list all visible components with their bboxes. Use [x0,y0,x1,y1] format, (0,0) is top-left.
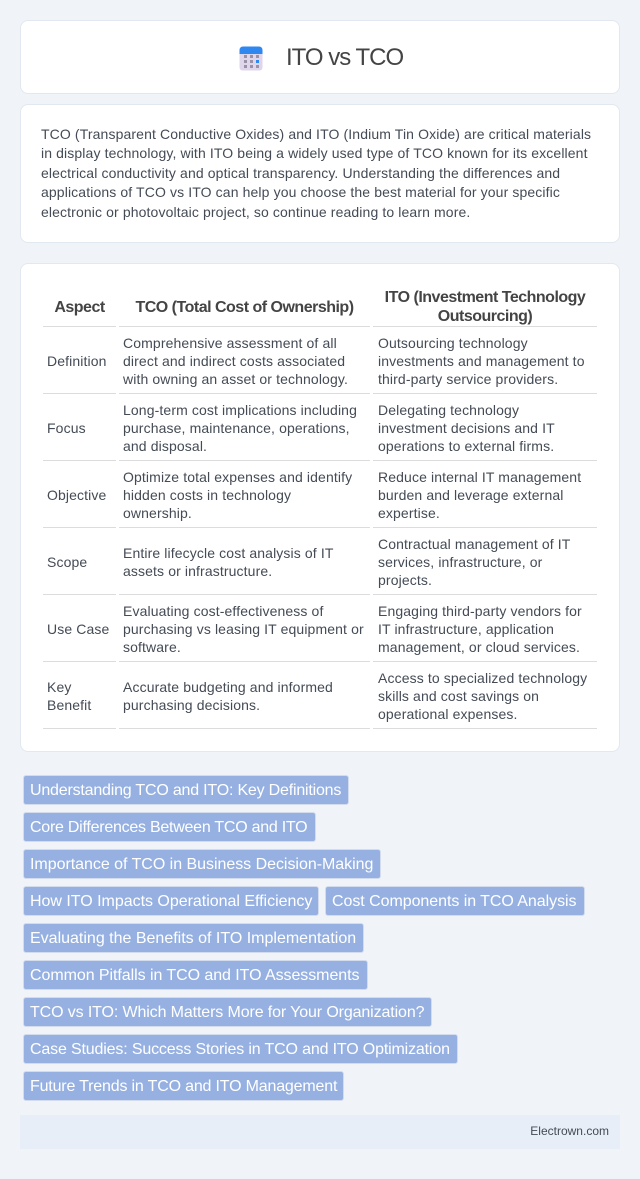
tag [23,923,364,953]
intro text: electrical conductivity and optical transparency. Understanding the differences and [41,165,560,181]
intro text [41,126,591,220]
row: Key Benefit: skills and cost savings on [378,688,539,704]
row: Definition: with owning an asset or technology. [123,371,348,387]
tag [23,1034,458,1064]
row: Definition: third-party service providers. [378,371,558,387]
row: Definition [47,335,585,387]
tag [325,886,585,916]
row: Definition: Definition [47,353,107,369]
row: Use Case: management, or cloud services. [378,639,580,655]
title: ITO vs TCO [286,44,403,71]
row: Use Case: Engaging third-party vendors for [378,603,582,619]
tag [23,960,368,990]
intro text: electronic or photovoltaic project, so continue reading to learn more. [41,204,470,220]
table header: ITO (Investment Technology [385,289,585,306]
row: Scope: Entire lifecycle cost analysis of IT [123,545,334,561]
tag: Common Pitfalls in TCO and ITO Assessments [30,967,359,984]
row: Definition: Comprehensive assessment of all [123,335,337,351]
row: Focus: and disposal. [123,438,207,454]
row: Definition: investments and management to [378,353,585,369]
row: Focus: Focus [47,420,86,436]
row: Key Benefit [47,670,588,722]
row: Objective: hidden costs in technology [123,487,291,503]
row: Use Case: Evaluating cost-effectiveness of [123,603,323,619]
footer credit: Electrown.com [530,1124,609,1138]
tag: Evaluating the Benefits of ITO Implementation [30,930,356,947]
tag: Understanding TCO and ITO: Key Definitions [30,782,341,799]
intro text: TCO (Transparent Conductive Oxides) and ITO (Indium Tin Oxide) are critical materials [41,126,591,142]
row: Definition: Outsourcing technology [378,335,528,351]
row: Objective: burden and leverage external [378,487,564,503]
row: Key Benefit: operational expenses. [378,706,518,722]
row: Scope: services, infrastructure, or [378,554,542,570]
row: Focus [47,402,555,454]
row: Scope [47,536,570,588]
tag: Future Trends in TCO and ITO Management [30,1078,337,1095]
row: Key Benefit: purchasing decisions. [123,697,260,713]
table header [54,289,586,325]
row: Objective: ownership. [123,505,192,521]
row: Objective [47,469,582,521]
intro panel [20,104,620,243]
tag [23,997,432,1027]
footer [20,1115,620,1149]
row: Key Benefit: Benefit [47,697,91,713]
comparison table panel [20,263,620,752]
intro text: in display technology, with ITO being a widely used type of TCO known for its excellent [41,145,588,161]
tag: TCO vs ITO: Which Matters More for Your Organization? [30,1004,424,1021]
row: Focus: purchase, maintenance, operations, [123,420,350,436]
row: Objective: expertise. [378,505,440,521]
row: Use Case [47,603,582,655]
row: Objective: Objective [47,487,106,503]
row: Focus: Delegating technology [378,402,519,418]
row: Key Benefit: Access to specialized technology [378,670,587,686]
icon: calendar [240,46,262,70]
row: Focus: investment decisions and IT [378,420,555,436]
row: Use Case: software. [123,639,181,655]
header panel [20,20,620,94]
row: Objective: Optimize total expenses and identify [123,469,352,485]
table header: Outsourcing) [438,308,532,325]
table header: TCO (Total Cost of Ownership) [135,299,354,316]
tag: Cost Components in TCO Analysis [332,893,576,910]
row: Scope: projects. [378,572,432,588]
row: Scope: Scope [47,554,87,570]
row: Key Benefit: Key [47,679,71,695]
tag: Importance of TCO in Business Decision-Making [30,856,373,873]
row: Scope: Contractual management of IT [378,536,570,552]
topic tag list [23,775,585,1101]
tag [23,886,319,916]
row: Scope: assets or infrastructure. [123,563,272,579]
table header: Aspect [54,299,105,316]
tag [23,849,381,879]
row: Focus: operations to external firms. [378,438,554,454]
row: Focus: Long-term cost implications including [123,402,357,418]
row: Use Case: IT infrastructure, application [378,621,554,637]
row: Use Case: purchasing vs leasing IT equipment or [123,621,364,637]
intro text: applications of TCO vs ITO can help you choose the best material for your specific [41,184,560,200]
row: Key Benefit: Accurate budgeting and informed [123,679,333,695]
row: Definition: direct and indirect costs associated [123,353,345,369]
row: Use Case: Use Case [47,621,109,637]
tag: Case Studies: Success Stories in TCO and ITO Optimization [30,1041,450,1058]
tag [23,812,316,842]
row: Objective: Reduce internal IT management [378,469,581,485]
tag [23,1071,344,1101]
tag [23,775,349,805]
tag: Core Differences Between TCO and ITO [30,819,307,836]
tag: How ITO Impacts Operational Efficiency [30,893,312,910]
